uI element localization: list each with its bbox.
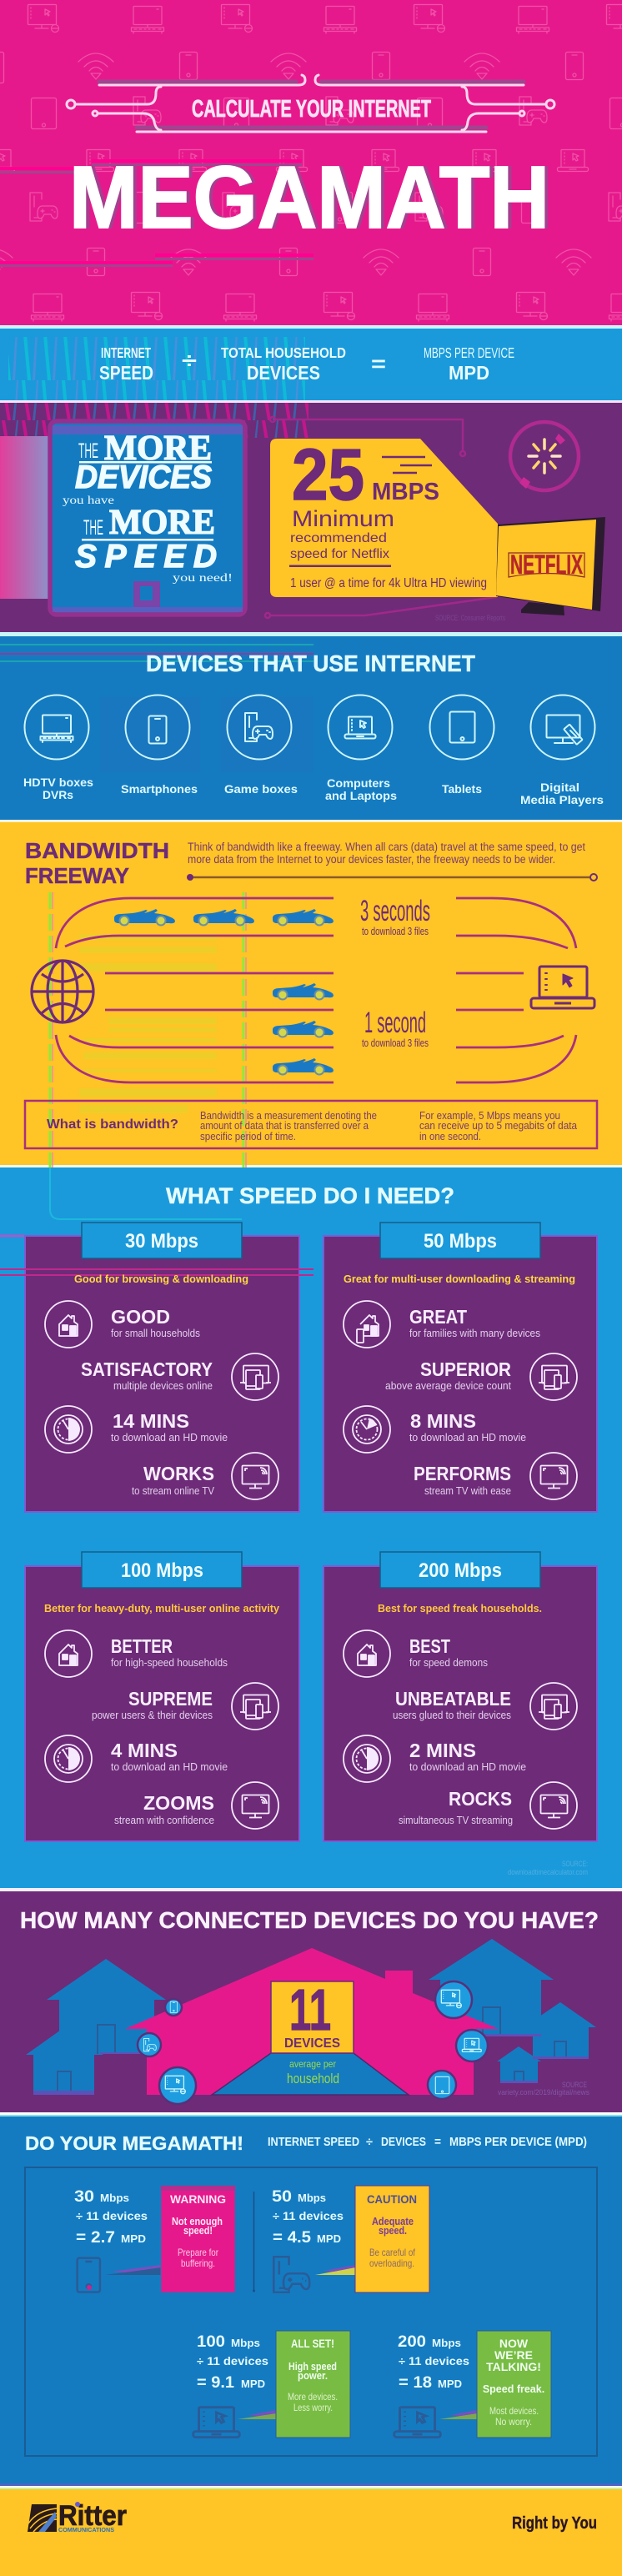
calc: 200 Mbps now we're talking xyxy=(394,2331,551,2438)
formula strip: INTERNET xyxy=(101,344,151,361)
panel: more devices more speed: THE xyxy=(83,516,103,540)
calc: 200 Mbps now we're talking: 200 xyxy=(398,2332,426,2351)
megamath frame xyxy=(25,2167,597,2456)
calc: 50 Mbps caution: ÷ 11 devices xyxy=(273,2209,344,2222)
panel: 50 Mbps: 50 Mbps xyxy=(424,1230,497,1253)
panel: 30 Mbps: WORKS xyxy=(143,1463,214,1484)
main pink house: average per xyxy=(289,2058,336,2070)
formula line xyxy=(268,2135,587,2149)
heading: bandwidth freeway: BANDWIDTH xyxy=(25,840,169,863)
calc: 30 Mbps warning: = 2.7 xyxy=(76,2228,115,2247)
main pink house xyxy=(125,1948,499,2095)
calc: 200 Mbps now we're talking: Mbps xyxy=(432,2337,461,2349)
panel: 100 Mbps: ZOOMS xyxy=(143,1792,214,1814)
icon: loading spinner xyxy=(510,422,579,490)
calc: 50 Mbps caution: MPD xyxy=(317,2232,341,2245)
panel: 200 Mbps: 2 MINS xyxy=(409,1740,476,1761)
panel: 100 Mbps: power users & their devices xyxy=(92,1709,213,1721)
bandwidth intro text: Think of bandwidth like a freeway. When all cars (data) travel at the same speed, to get xyxy=(188,841,585,853)
panel: 200 Mbps: simultaneous TV streaming xyxy=(399,1814,513,1826)
panel: 30 Mbps: 14 MINS xyxy=(113,1410,189,1432)
calc: 50 Mbps caution: = 4.5 xyxy=(273,2228,311,2247)
device labels xyxy=(23,776,604,806)
callout: what is bandwidth: What is bandwidth? xyxy=(47,1117,178,1132)
heading: do your megamath: DO YOUR MEGAMATH! xyxy=(25,2132,243,2154)
left gradient block xyxy=(0,436,48,599)
calc: 30 Mbps warning: Mbps xyxy=(100,2192,129,2204)
calc: 50 Mbps caution: Be careful of xyxy=(369,2247,416,2258)
calc: 200 Mbps now we're talking: WE’RE xyxy=(494,2348,533,2362)
formula strip: TOTAL HOUSEHOLD xyxy=(221,344,346,361)
callout: what is bandwidth: can receive up to 5 megabits of data xyxy=(419,1119,578,1132)
callout: what is bandwidth xyxy=(25,1101,597,1148)
panel: 30 Mbps: for small households xyxy=(111,1327,200,1339)
device labels: DVRs xyxy=(43,788,73,801)
decorative glitch artefacts xyxy=(0,159,314,772)
background icon pattern xyxy=(0,5,622,321)
panel: 25 Mbps Netflix: MBPS xyxy=(372,479,439,505)
icon: laptop xyxy=(531,967,594,1008)
panel: 25 Mbps Netflix: Minimum xyxy=(292,506,394,531)
title: MEGAMATH: MEGAMATH xyxy=(69,148,549,247)
timeline line xyxy=(187,874,597,881)
device labels: Digital xyxy=(540,781,579,794)
panel: 30 Mbps: SATISFACTORY xyxy=(81,1358,213,1380)
device labels: and Laptops xyxy=(325,789,397,802)
calc: 100 Mbps all set: ÷ 11 devices xyxy=(197,2354,268,2368)
device labels: Media Players xyxy=(520,793,604,806)
panel: 25 Mbps Netflix: speed for Netflix xyxy=(290,547,389,561)
calc: 50 Mbps caution: Adequate xyxy=(372,2216,414,2227)
calc: 30 Mbps warning: speed! xyxy=(183,2225,213,2237)
device bubbles around house xyxy=(138,1981,488,2104)
source note: SOURCE: xyxy=(562,1860,588,1869)
source note: downloadtimecalculator.com xyxy=(508,1868,588,1877)
panel: 200 Mbps: to download an HD movie xyxy=(409,1760,526,1773)
panel: 50 Mbps: stream TV with ease xyxy=(424,1484,511,1497)
calc: 30 Mbps warning: WARNING xyxy=(170,2192,226,2206)
formula line: DEVICES xyxy=(381,2135,426,2149)
panel: 50 Mbps: Great for multi-user downloading & streaming xyxy=(344,1273,575,1285)
panel: 50 Mbps: to download an HD movie xyxy=(409,1431,526,1444)
divider xyxy=(253,2192,255,2292)
panel: 30 Mbps: multiple devices online xyxy=(113,1379,213,1392)
calc: 200 Mbps now we're talking: Most devices. xyxy=(489,2405,539,2417)
panel: 200 Mbps xyxy=(324,1552,597,1841)
download time labels xyxy=(360,895,430,1049)
formula line: ÷ xyxy=(366,2135,373,2149)
panel: more devices more speed: MORE xyxy=(104,429,212,468)
source note xyxy=(498,2081,589,2097)
title frame with circuit lines xyxy=(67,75,554,132)
device labels: Computers xyxy=(327,776,390,790)
panel: 50 Mbps: above average device count xyxy=(385,1379,511,1392)
device labels: Game boxes xyxy=(224,782,298,796)
panel: more devices more speed: DEVICES xyxy=(75,459,212,495)
subtitle: calculate your internet: CALCULATE YOUR INTERNET xyxy=(192,96,431,123)
tagline: Right by You: Right by You xyxy=(512,2514,597,2533)
source note xyxy=(508,1860,588,1877)
panel: 100 Mbps: 100 Mbps xyxy=(121,1559,203,1582)
formula strip: = xyxy=(371,351,386,376)
calc: 50 Mbps caution: 50 xyxy=(272,2187,292,2206)
panel: more devices more speed: you need! xyxy=(173,572,233,585)
panel: 100 Mbps: stream with confidence xyxy=(114,1814,214,1826)
device labels: Smartphones xyxy=(121,782,198,796)
panel: 200 Mbps: 200 Mbps xyxy=(419,1559,502,1582)
panel: 100 Mbps: 4 MINS xyxy=(111,1740,178,1761)
main pink house: household xyxy=(287,2071,339,2086)
icon: globe xyxy=(32,961,93,1022)
title: MEGAMATH: MEGAMATH xyxy=(73,148,553,247)
calc: 30 Mbps warning: buffering. xyxy=(181,2257,215,2269)
panel: 25 Mbps Netflix: recommended xyxy=(290,531,387,545)
calc: 100 Mbps all set: More devices. xyxy=(288,2391,338,2403)
icon: Netflix TV: NETFLIX xyxy=(510,550,583,580)
panel: 30 Mbps: to stream online TV xyxy=(132,1484,214,1497)
source note: SOURCE: Consumer Reports xyxy=(435,614,505,622)
calc: 200 Mbps now we're talking: = 18 xyxy=(399,2373,432,2392)
panel: 50 Mbps: SUPERIOR xyxy=(420,1358,511,1380)
download time labels: to download 3 files xyxy=(362,925,429,937)
glitch arc and lines xyxy=(0,1167,242,1236)
panel: 50 Mbps xyxy=(324,1223,597,1512)
heading: what speed do I need: WHAT SPEED DO I NEED? xyxy=(166,1183,454,1208)
background houses xyxy=(26,1939,596,2095)
calc: 200 Mbps now we're talking: TALKING! xyxy=(486,2360,541,2373)
calc: 200 Mbps now we're talking: ÷ 11 devices xyxy=(399,2354,469,2368)
formula line: INTERNET SPEED xyxy=(268,2135,359,2149)
panel: 30 Mbps: GOOD xyxy=(111,1306,170,1328)
calc: 100 Mbps all set: 100 xyxy=(197,2332,225,2351)
device labels: Tablets xyxy=(442,782,482,796)
calc: 200 Mbps now we're talking: MPD xyxy=(438,2378,462,2390)
panel: 200 Mbps: Best for speed freak households. xyxy=(378,1602,542,1614)
formula line: = xyxy=(434,2135,441,2149)
logo: Ritter Communications xyxy=(28,2500,127,2533)
formula line: MBPS PER DEVICE (MPD) xyxy=(449,2135,587,2149)
bandwidth intro text: more data from the Internet to your devices faster, the freeway needs to be wider. xyxy=(188,853,555,866)
freeway road lines xyxy=(56,898,576,1082)
panel: more devices more speed: THE xyxy=(78,439,98,463)
calc: 30 Mbps warning: Not enough xyxy=(172,2216,223,2227)
panel: 30 Mbps: to download an HD movie xyxy=(111,1431,228,1444)
callout: what is bandwidth: amount of data that is transferred over a xyxy=(200,1119,369,1132)
panel: 25 Mbps Netflix: 25 xyxy=(292,434,364,515)
panel: 30 Mbps: 30 Mbps xyxy=(125,1230,198,1253)
heading: devices that use internet: DEVICES THAT USE INTERNET xyxy=(146,650,475,676)
heading: bandwidth freeway: FREEWAY xyxy=(25,865,129,888)
formula strip: MPD xyxy=(449,362,489,384)
calc: 100 Mbps all set xyxy=(193,2331,350,2438)
callout: what is bandwidth: in one second. xyxy=(419,1130,481,1142)
main pink house: 11 xyxy=(289,1977,331,2042)
logo: Ritter Communications: Ritter xyxy=(58,2500,127,2532)
device labels: HDTV boxes xyxy=(23,776,93,789)
panel: 200 Mbps: ROCKS xyxy=(449,1788,512,1810)
panel: more devices more speed xyxy=(50,421,245,615)
calc: 200 Mbps now we're talking: Speed freak. xyxy=(483,2383,544,2395)
heading: bandwidth freeway xyxy=(25,840,169,888)
glitch ghost strips and dashed guides xyxy=(50,892,246,1167)
panel: 25 Mbps Netflix: 1 user @ a time for 4k Ultra HD viewing xyxy=(290,576,487,590)
panel: 100 Mbps: Better for heavy-duty, multi-user online activity xyxy=(44,1602,280,1614)
heading: how many connected devices: HOW MANY CONNECTED DEVICES DO YOU HAVE? xyxy=(20,1907,599,1933)
panel: 25 Mbps Netflix xyxy=(270,434,498,597)
formula strip: DEVICES xyxy=(247,362,320,384)
bandwidth intro text xyxy=(188,841,585,866)
calc: 100 Mbps all set: power. xyxy=(298,2370,328,2382)
calc: 30 Mbps warning: ÷ 11 devices xyxy=(76,2209,148,2222)
panel: 100 Mbps: SUPREME xyxy=(128,1688,213,1710)
panel: 30 Mbps: Good for browsing & downloading xyxy=(74,1273,248,1285)
panel: 50 Mbps: PERFORMS xyxy=(414,1463,511,1484)
panel: 100 Mbps xyxy=(25,1552,299,1841)
calc: 30 Mbps warning: MPD xyxy=(121,2232,146,2245)
calc: 100 Mbps all set: Less worry. xyxy=(293,2402,333,2413)
panel: more devices more speed: SPEED xyxy=(75,539,217,575)
panel: more devices more speed: you have xyxy=(63,495,114,507)
panel: 200 Mbps: for speed demons xyxy=(409,1656,488,1669)
calc: 50 Mbps caution: CAUTION xyxy=(367,2192,417,2206)
calc: 30 Mbps warning: 30 xyxy=(74,2187,94,2206)
calc: 100 Mbps all set: = 9.1 xyxy=(197,2373,234,2392)
calc: 50 Mbps caution: speed. xyxy=(379,2225,407,2237)
formula strip xyxy=(99,344,514,384)
panel: 200 Mbps: users glued to their devices xyxy=(393,1709,511,1721)
download time labels: to download 3 files xyxy=(362,1037,429,1049)
calc: 30 Mbps warning: Prepare for xyxy=(178,2247,218,2258)
cars xyxy=(114,909,334,1074)
calc: 100 Mbps all set: MPD xyxy=(241,2378,265,2390)
logo: Ritter Communications: COMMUNICATIONS xyxy=(58,2526,114,2533)
panel: 100 Mbps: BETTER xyxy=(111,1635,173,1657)
callout: what is bandwidth: specific period of time. xyxy=(200,1130,296,1142)
panel: more devices more speed: MORE xyxy=(109,504,215,542)
calc: 50 Mbps caution xyxy=(272,2186,429,2292)
source note: SOURCE xyxy=(562,2081,587,2090)
panel: 50 Mbps: GREAT xyxy=(409,1306,467,1328)
calc: 200 Mbps now we're talking: NOW xyxy=(499,2337,529,2350)
download time labels: 3 seconds xyxy=(360,895,430,927)
source note: variety.com/2019/digital/news xyxy=(498,2088,589,2097)
callout: what is bandwidth: For example, 5 Mbps means you xyxy=(419,1109,560,1122)
panel: 100 Mbps: to download an HD movie xyxy=(111,1760,228,1773)
calc: 100 Mbps all set: ALL SET! xyxy=(291,2337,334,2350)
icon: Netflix TV xyxy=(496,517,605,615)
panel: 50 Mbps: 8 MINS xyxy=(410,1410,476,1432)
formula strip: ÷ xyxy=(182,348,197,373)
formula strip: SPEED xyxy=(99,362,153,384)
callout: what is bandwidth: Bandwidth is a measurement denoting the xyxy=(200,1109,377,1122)
icons: device circles xyxy=(25,695,595,759)
panel: 50 Mbps: for families with many devices xyxy=(409,1327,540,1339)
panel: 30 Mbps xyxy=(0,1223,314,1512)
panel: 100 Mbps: for high-speed households xyxy=(111,1656,228,1669)
main pink house: DEVICES xyxy=(284,2036,340,2051)
panel: 200 Mbps: BEST xyxy=(409,1635,450,1657)
calc: 100 Mbps all set: Mbps xyxy=(231,2337,260,2349)
calc: 200 Mbps now we're talking: No worry. xyxy=(495,2416,532,2428)
download time labels: 1 second xyxy=(364,1007,426,1039)
calc: 30 Mbps warning xyxy=(74,2186,235,2292)
formula strip: MBPS PER DEVICE xyxy=(424,344,514,361)
calc: 50 Mbps caution: overloading. xyxy=(369,2257,414,2269)
calc: 100 Mbps all set: High speed xyxy=(288,2361,337,2373)
panel: 200 Mbps: UNBEATABLE xyxy=(395,1688,511,1710)
calc: 50 Mbps caution: Mbps xyxy=(298,2192,326,2204)
circuit lines around Netflix panel xyxy=(265,417,496,618)
